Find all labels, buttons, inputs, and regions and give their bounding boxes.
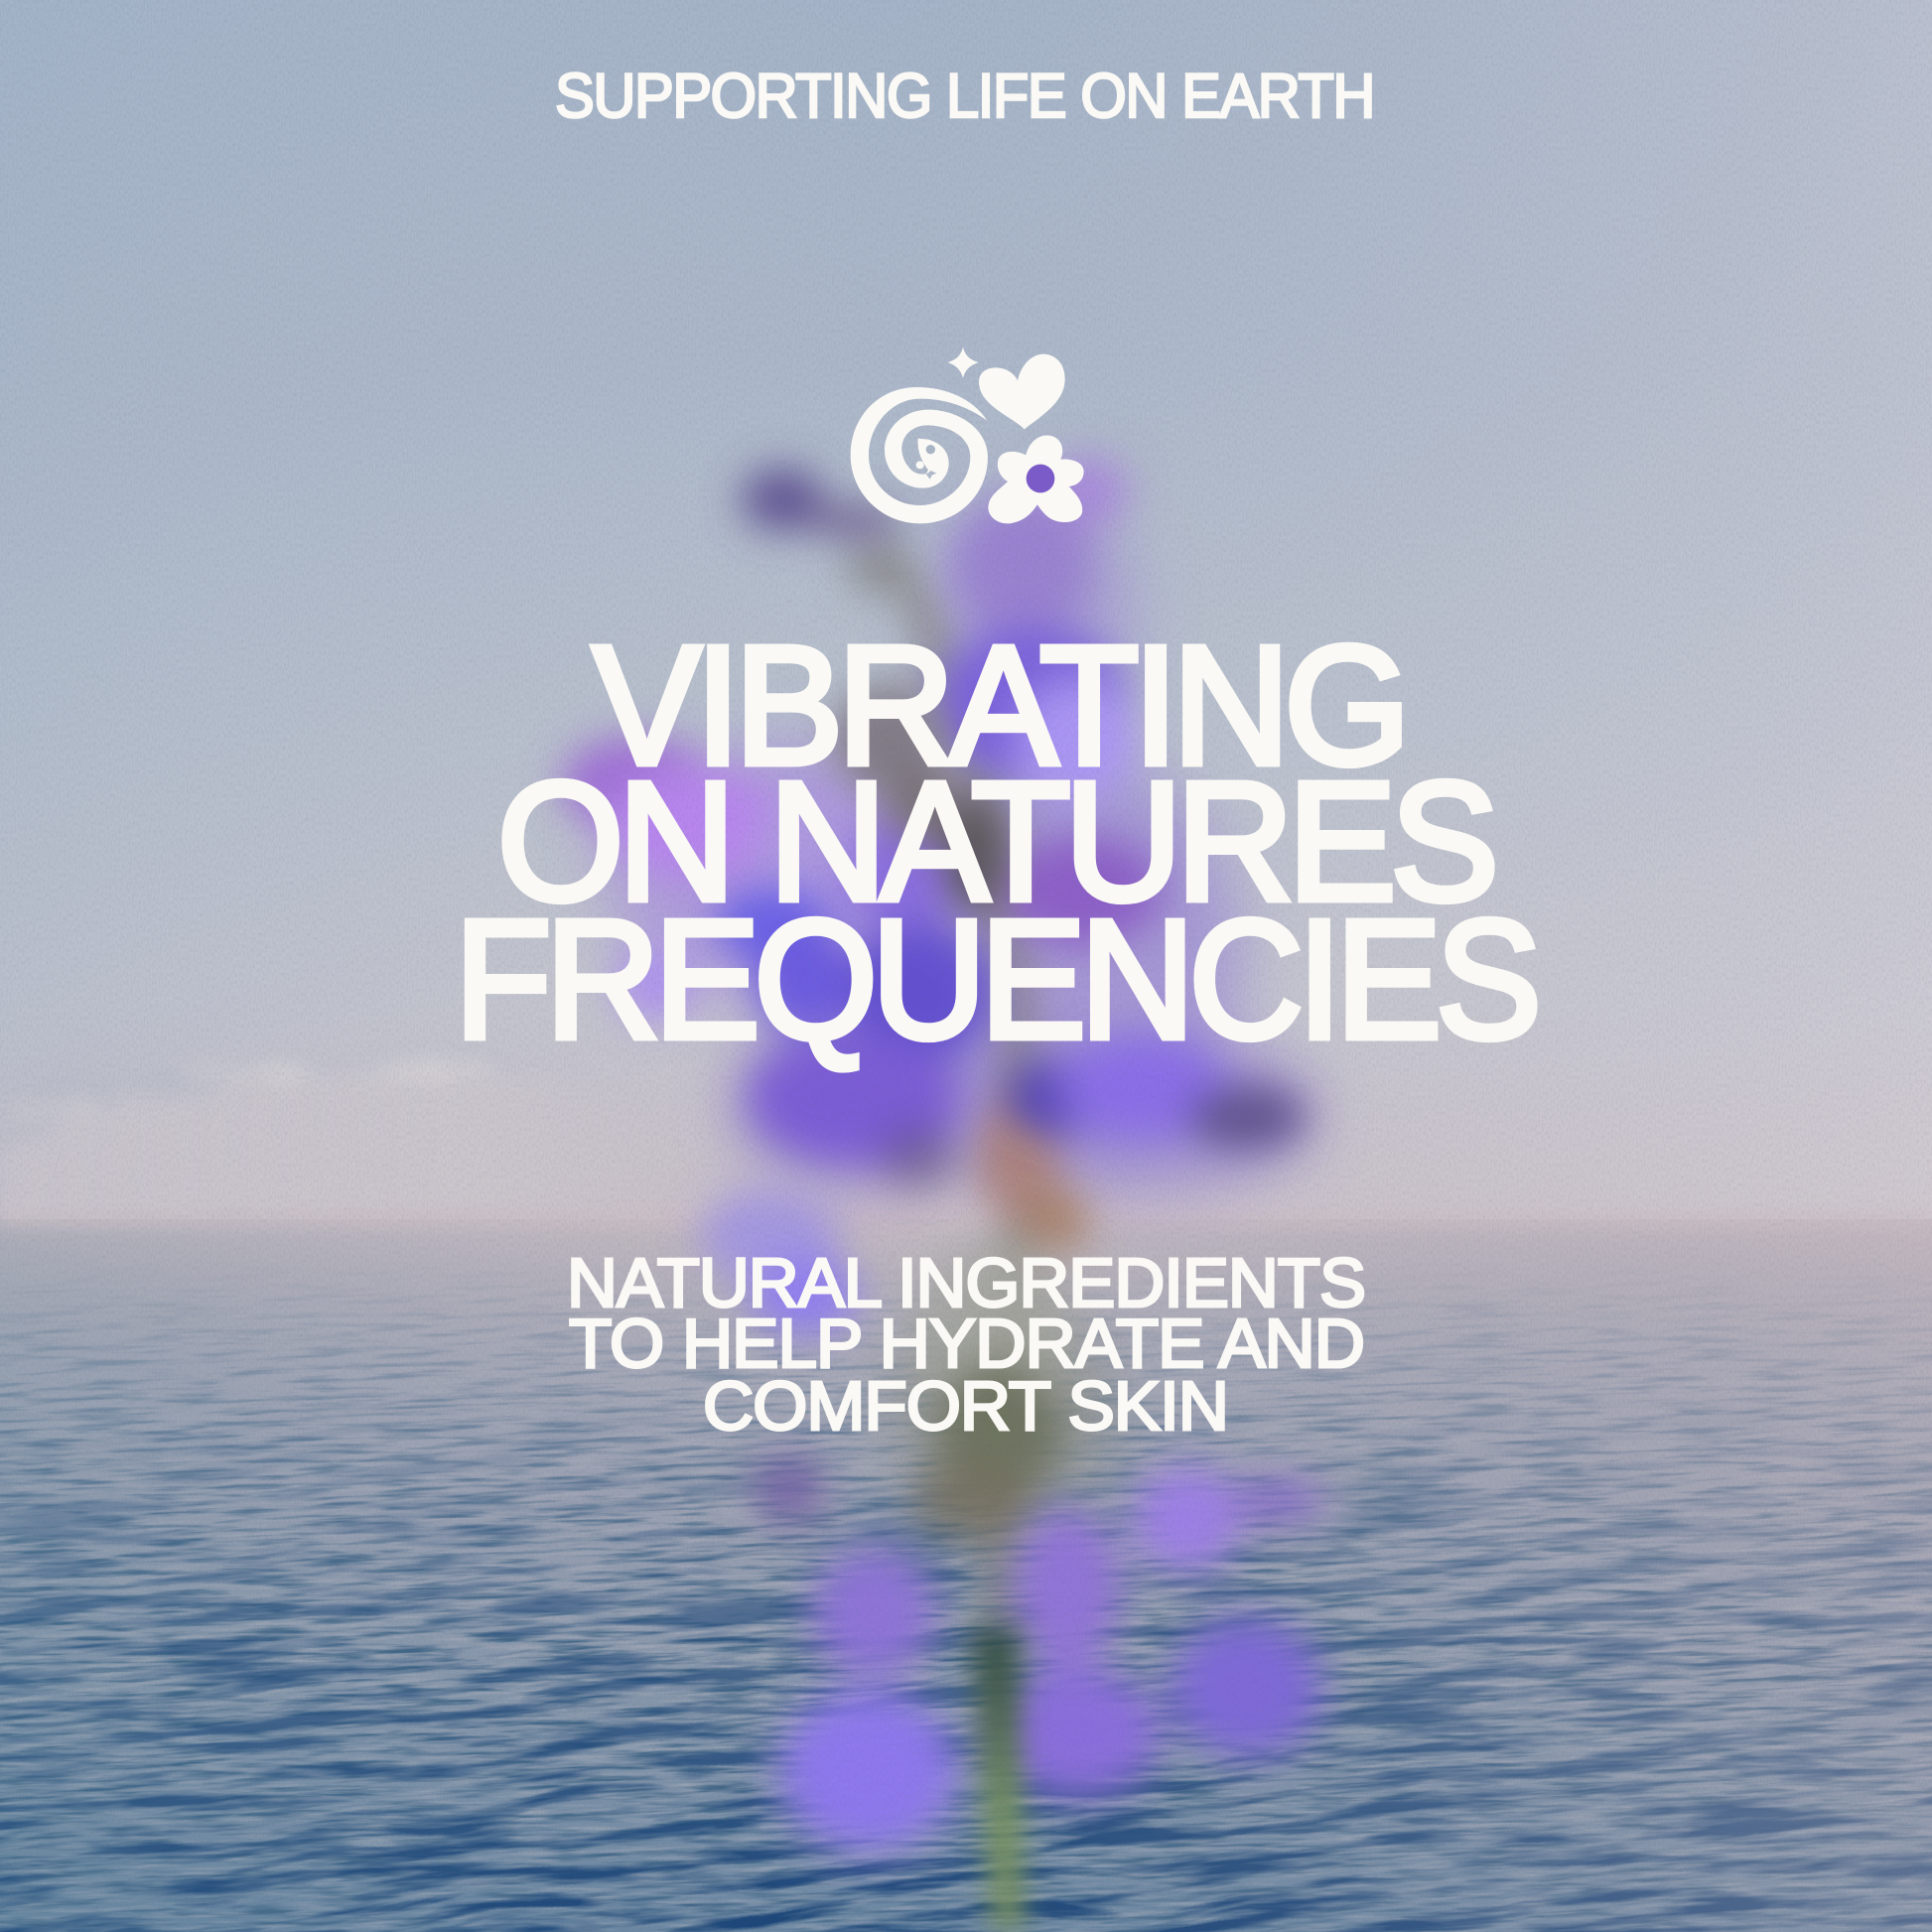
dark lower stem [971,1628,1023,1932]
blurred purple flower [561,456,1325,1932]
main title: ON NATURES [497,748,1493,936]
subheading: COMFORT SKIN [703,1367,1228,1445]
soft purple haze around flower [606,496,1311,1847]
background: clouds on the horizon [0,1066,685,1219]
icon: spiral with fish [851,387,988,523]
top heading: SUPPORTING LIFE ON EARTH [555,62,1374,131]
background: sky [0,0,1932,1221]
icon: sparkle [947,346,979,378]
background: sea [0,1211,1932,1932]
main title: FREQUENCIES [455,886,1536,1074]
bubble [916,461,924,469]
icon: flower [988,436,1084,523]
main title [455,612,1536,1074]
fish eye [926,445,935,454]
subheading [567,1244,1365,1445]
icon: spiral, heart, sparkle and flower [851,346,1084,523]
flower stem [848,538,1090,1638]
main title: VIBRATING [593,612,1405,800]
grey stem shadows behind the title [834,685,1003,913]
subheading: TO HELP HYDRATE AND [569,1305,1364,1382]
subheading: NATURAL INGREDIENTS [567,1244,1365,1321]
icon: heart [979,354,1065,429]
flower petals [561,456,1325,1845]
